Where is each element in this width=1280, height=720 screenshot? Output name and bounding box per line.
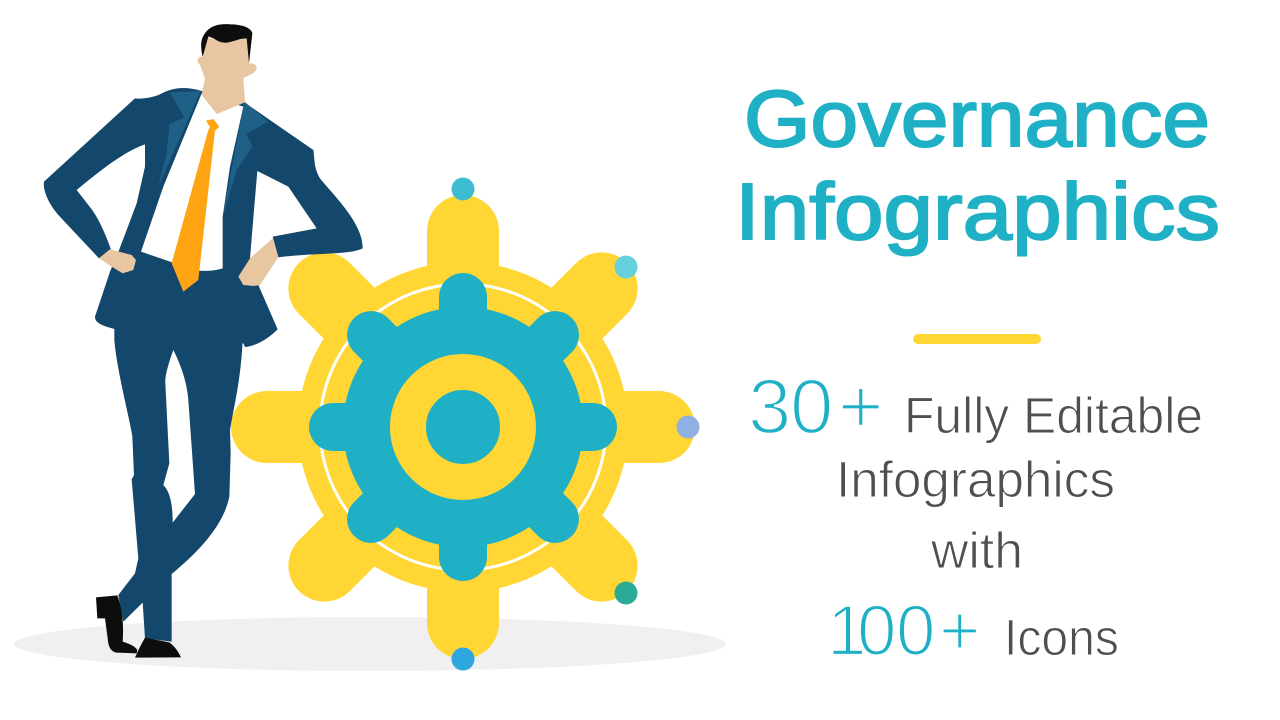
front shoe	[135, 638, 181, 658]
stat: 30+: 30+	[748, 362, 884, 450]
trousers	[114, 317, 242, 642]
teal inner gear	[309, 273, 617, 581]
text: with: with	[930, 522, 1023, 579]
dot: upper right	[614, 256, 638, 278]
dot: top	[452, 178, 474, 200]
right hand	[238, 238, 278, 286]
hair	[201, 24, 252, 63]
white ring	[320, 284, 606, 570]
ground shadow	[14, 617, 726, 671]
text: Icons: Icons	[1004, 609, 1119, 666]
back shoe	[96, 595, 137, 653]
title	[735, 74, 1220, 256]
jacket	[44, 88, 363, 347]
left hand	[99, 249, 136, 273]
businessman figure	[44, 24, 363, 658]
neck and face	[197, 37, 257, 114]
tie	[172, 119, 219, 292]
title line 2: Infographics	[735, 167, 1220, 256]
icon: large gear	[231, 195, 695, 659]
dot: right	[676, 416, 700, 438]
title line 1: Governance	[744, 74, 1210, 163]
text: Infographics: Infographics	[836, 451, 1115, 508]
yellow outer gear	[231, 195, 695, 659]
upper body	[44, 24, 363, 347]
gear hub	[408, 372, 518, 482]
stat: 100+: 100+	[827, 592, 980, 671]
dot: bottom	[452, 648, 474, 670]
text: Fully Editable: Fully Editable	[904, 387, 1203, 444]
shirt	[141, 93, 243, 271]
legs and shoes	[96, 317, 242, 658]
divider bar	[913, 334, 1041, 344]
lapels	[158, 91, 268, 217]
subtitle	[748, 362, 1203, 671]
dot: lower right	[614, 582, 638, 604]
